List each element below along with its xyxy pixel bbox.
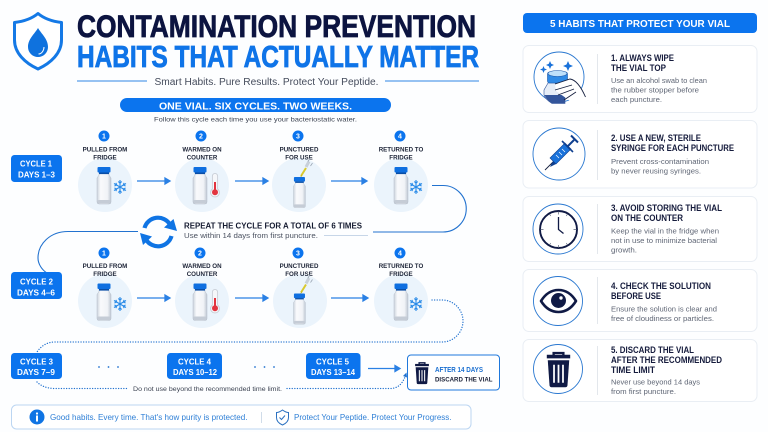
cycle 2 label: DAYS 4–6 [17,288,55,298]
step 3: punctured for use [273,248,327,328]
step 4: returned to fridge: RETURNED TO [379,263,423,270]
step 2: warmed on counter: COUNTER [187,154,218,162]
arrow [368,366,400,372]
step 4: returned to fridge: 4 [398,250,402,258]
panel: habit 4: BEFORE USE [611,291,661,301]
callout: discard the vial [408,355,500,390]
panel: habit 3: 3. AVOID STORING THE VIAL [611,203,723,213]
icon: shield with water drop [14,14,62,69]
title: HABITS THAT ACTUALLY MATTER [77,40,479,74]
step 4: returned to fridge: 4 [398,134,402,140]
icon: eye [534,276,582,326]
icon: wiping vial top [534,52,586,104]
step 3: punctured for use: PUNCTURED [280,263,319,270]
arrow [137,178,170,184]
step 3: punctured for use: FOR USE [285,154,313,162]
cycle 1 label [11,155,62,182]
step 1: pulled from fridge: FRIDGE [93,271,117,278]
cycle 1 label: DAYS 1–3 [18,170,55,180]
step 2: warmed on counter: 2 [199,134,203,140]
step 1: pulled from fridge: 1 [102,250,106,258]
ellipsis [98,366,119,368]
banner: one vial six cycles [120,98,391,112]
arrow [235,178,268,184]
icon: clock [533,204,583,254]
panel: habit 4: 4. CHECK THE SOLUTION [611,281,711,291]
cycle 3 label [11,353,62,379]
cycle 3 label: CYCLE 3 [20,356,53,366]
connector: repeat to cycle 2 [38,232,138,273]
step 2: warmed on counter: COUNTER [187,271,218,278]
ellipsis [254,366,275,368]
panel header: 5 habits [523,13,757,33]
icon: repeat arrows [140,218,177,246]
instruction text: Follow this cycle each time you use your bacteriostatic water. [154,116,357,124]
panel: habit 5: from first puncture. [611,387,676,396]
step 1: pulled from fridge [78,248,132,328]
step 3: punctured for use: 3 [296,134,300,140]
cycle 3 label: DAYS 7–9 [17,367,55,377]
panel: habit 5: 5. DISCARD THE VIAL [611,345,695,355]
panel: habit 1: THE VIAL TOP [611,63,666,73]
panel: habit 4: Ensure the solution is clear and [611,304,717,314]
step 3: punctured for use: PUNCTURED [280,146,319,154]
arrow [137,295,170,301]
panel: habit 3: Keep the vial in the fridge when [611,226,719,236]
panel: habit 3: not in use to minimize bacterial [611,236,717,245]
panel: habit 5: TIME LIMIT [611,365,656,375]
step 4: returned to fridge: FRIDGE [389,154,413,162]
step 2: warmed on counter: WARMED ON [182,263,222,270]
arrow [235,295,268,301]
row 1: cycle steps [78,130,428,212]
step 4: returned to fridge: FRIDGE [389,271,413,278]
cycle 4 label: CYCLE 4 [178,356,211,366]
arrow [331,178,367,184]
title [77,8,479,74]
cycle 4 label [167,353,222,379]
panel: habit 1: Use an alcohol swab to clean [611,76,707,85]
panel: habit 4 [523,270,757,332]
step 1: pulled from fridge: 1 [102,134,106,140]
step 2: warmed on counter: 2 [198,250,202,258]
title: CONTAMINATION PREVENTION [77,8,476,44]
icon: info [30,410,44,424]
callout: discard the vial: AFTER 14 DAYS [435,367,483,374]
cycle 1 label: CYCLE 1 [20,158,52,168]
repeat text [184,222,368,240]
row 2: cycle steps [78,248,428,328]
panel: habit 2: SYRINGE FOR EACH PUNCTURE [611,143,734,153]
panel: habit 2: by never reusing syringes. [611,166,701,176]
connector: row 1 to repeat [373,186,466,232]
step 4: returned to fridge [374,130,428,212]
panel: habit 5: AFTER THE RECOMMENDED [611,355,723,365]
dotted time-limit line [37,372,407,393]
dotted connector: row 2 to row 3 [37,300,463,352]
footer bar: Protect Your Peptide. Protect Your Progress. [294,413,452,422]
footer bar [12,405,471,429]
footer bar: Good habits. Every time. That's how purity is protected. [50,413,248,422]
panel: habit 2 [523,120,757,188]
icon: syringe [533,128,585,180]
step 4: returned to fridge [374,248,428,328]
panel: habit 3: ON THE COUNTER [611,213,684,223]
icon: trash can [534,344,582,394]
step 1: pulled from fridge [78,130,132,212]
subtitle: Smart Habits. Pure Results. Protect Your Peptide. [154,77,378,88]
cycle 5 label: DAYS 13–14 [311,367,355,377]
cycle 2 label [11,272,62,299]
panel: habit 5: Never use beyond 14 days [611,378,700,386]
panel: habit 1: the rubber stopper before [611,86,699,94]
panel: habit 3: growth. [611,246,637,254]
step 1: pulled from fridge: PULLED FROM [83,146,127,154]
panel: habit 5 [523,340,757,402]
repeat text: REPEAT THE CYCLE FOR A TOTAL OF 6 TIMES [184,222,363,230]
step 3: punctured for use: 3 [296,250,300,258]
panel: habit 3 [523,196,757,262]
cycle 5 label [306,353,360,379]
banner: one vial six cycles: ONE VIAL. SIX CYCLES. TWO WEEKS. [159,101,352,112]
panel: habit 2: Prevent cross-contamination [611,157,709,166]
panel: habit 4: free of cloudiness or particles. [611,314,714,323]
arrow [331,295,368,301]
panel: habit 1: 1. ALWAYS WIPE [611,53,674,63]
cycle 4 label: DAYS 10–12 [173,367,217,377]
cycle 5 label: CYCLE 5 [316,356,349,366]
panel header: 5 habits: 5 HABITS THAT PROTECT YOUR VIAL [550,18,731,30]
step 3: punctured for use: FOR USE [285,271,313,278]
callout: discard the vial: DISCARD THE VIAL [435,378,493,384]
icon: shield check [276,410,288,425]
step 1: pulled from fridge: PULLED FROM [83,263,127,270]
step 4: returned to fridge: RETURNED TO [379,146,423,154]
panel: habit 2: 2. USE A NEW, STERILE [611,133,701,143]
panel: habit 1: each puncture. [611,95,662,104]
step 3: punctured for use [272,130,326,212]
repeat text: Use within 14 days from first puncture. [184,231,318,240]
step 2: warmed on counter [175,248,229,328]
step 2: warmed on counter: WARMED ON [182,146,222,154]
step 1: pulled from fridge: FRIDGE [93,154,117,162]
panel: habit 1 [523,46,757,112]
step 2: warmed on counter [175,130,229,212]
dotted time-limit line: Do not use beyond the recommended time limit. [133,386,282,393]
cycle 2 label: CYCLE 2 [20,276,53,286]
